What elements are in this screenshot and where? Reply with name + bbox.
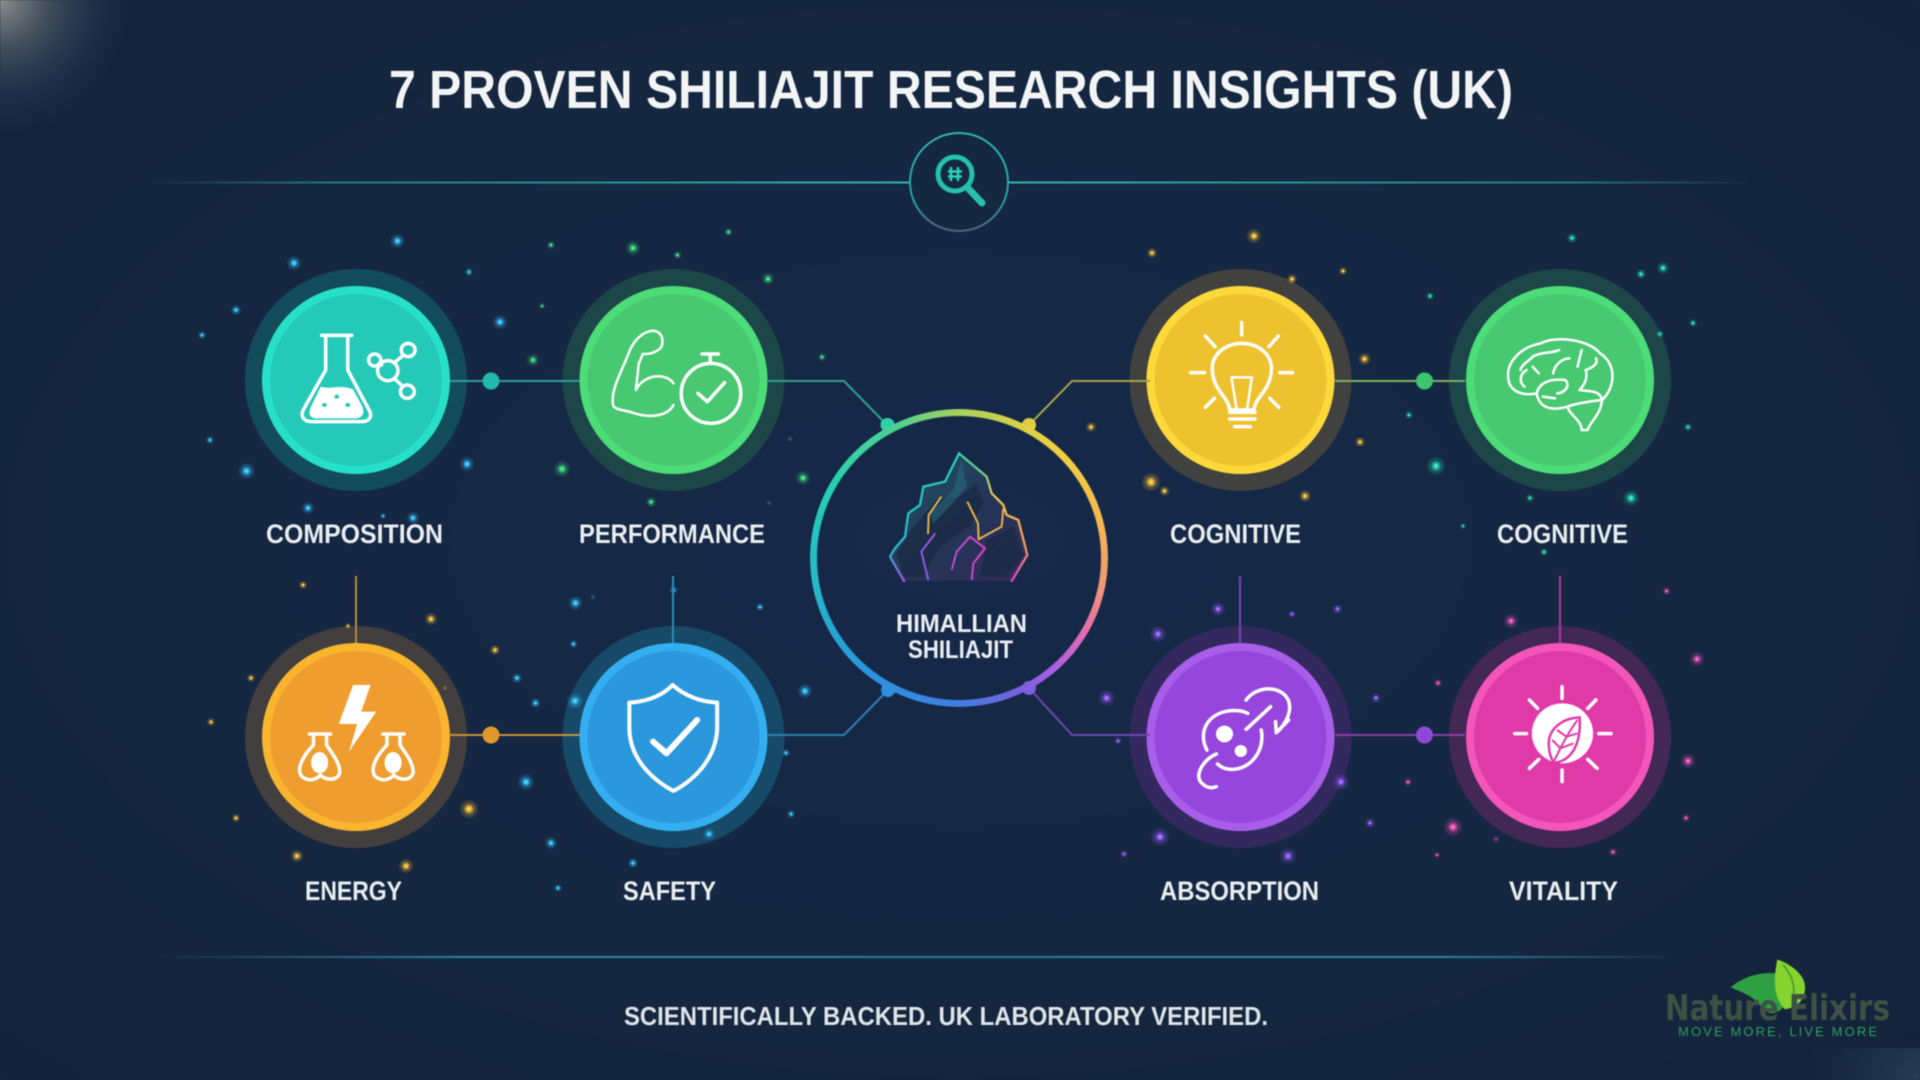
connector lines: [356, 381, 1560, 735]
labels: COMPOSITION: [266, 519, 443, 549]
node: cognitive bulb: [1130, 269, 1352, 491]
icon: leaves: [1731, 959, 1805, 1013]
particles: safety: [512, 586, 812, 892]
icon: muscle and stopwatch: [613, 331, 741, 423]
icon: absorption cycle: [1199, 689, 1290, 788]
logo: [1665, 959, 1890, 1039]
icon: bolt and flasks: [300, 685, 413, 780]
labels: [266, 519, 1628, 906]
icon: brain: [1508, 339, 1613, 430]
labels: VITALITY: [1509, 876, 1618, 906]
icon: flask and molecule: [302, 335, 415, 422]
connector dots: [482, 372, 1433, 744]
particles: vitality: [1404, 587, 1704, 858]
node: composition: [245, 269, 467, 491]
node: cognitive brain: [1449, 269, 1671, 491]
node: safety: [562, 626, 784, 848]
central rock icon: [890, 453, 1027, 581]
bottom divider: [150, 956, 1680, 958]
ring node dots: [880, 418, 1036, 697]
particles: energy: [207, 581, 500, 873]
header divider line: [150, 182, 1750, 184]
labels: ABSORPTION: [1160, 876, 1319, 906]
icon: sun and leaf: [1515, 687, 1611, 782]
icon: shield check: [629, 685, 717, 791]
central label: HIMALLIAN: [896, 610, 1027, 638]
central label: [896, 610, 1027, 664]
central ring: [810, 409, 1108, 707]
particles: composition: [198, 234, 507, 524]
particles: performance: [527, 228, 826, 507]
logo: MOVE MORE, LIVE MORE: [1678, 1024, 1877, 1039]
node: performance: [562, 269, 784, 491]
particles: absorption: [1098, 602, 1381, 864]
labels: PERFORMANCE: [579, 519, 765, 549]
node: energy: [245, 626, 467, 848]
node: vitality: [1449, 626, 1671, 848]
title: 7 PROVEN SHILIAJIT RESEARCH INSIGHTS (UK): [389, 60, 1513, 120]
icon: light bulb: [1191, 323, 1293, 427]
labels: SAFETY: [623, 876, 716, 906]
node: absorption: [1130, 626, 1352, 848]
particles: cognitive yellow: [1086, 229, 1370, 502]
labels: COGNITIVE: [1497, 519, 1628, 549]
labels: COGNITIVE: [1170, 519, 1301, 549]
icon: magnifier badge: [910, 133, 1008, 231]
tagline: SCIENTIFICALLY BACKED. UK LABORATORY VERIFIED.: [624, 1001, 1268, 1031]
central label: SHILIAJIT: [908, 636, 1013, 664]
particles: cognitive green: [1405, 233, 1697, 556]
labels: ENERGY: [305, 876, 402, 906]
